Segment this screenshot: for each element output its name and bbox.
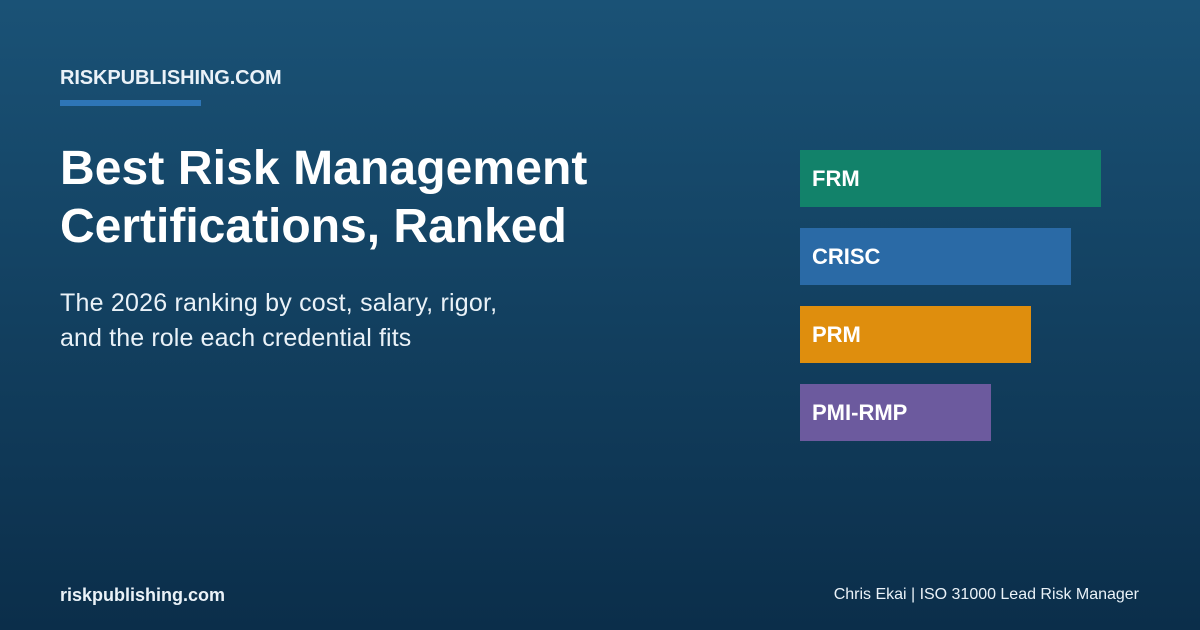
bar: CRISC: CRISC [812, 244, 880, 269]
subtitle [60, 289, 497, 352]
footer author credit: Chris Ekai | ISO 31000 Lead Risk Manager [834, 586, 1139, 603]
bar: FRM [800, 150, 1101, 207]
title [60, 142, 588, 253]
bar: PMI-RMP [800, 384, 991, 441]
bar: FRM: FRM [812, 166, 860, 191]
subtitle: The 2026 ranking by cost, salary, rigor, [60, 289, 497, 317]
title: Certifications, Ranked [60, 200, 567, 253]
brand accent rule [60, 100, 201, 106]
subtitle: and the role each credential fits [60, 324, 411, 352]
bar: PMI-RMP: PMI-RMP [812, 400, 907, 425]
title: Best Risk Management [60, 142, 588, 195]
bar: PRM: PRM [812, 322, 861, 347]
ranked bar chart [800, 150, 1101, 441]
bar: CRISC [800, 228, 1071, 285]
bar: PRM [800, 306, 1031, 363]
brand name: RISKPUBLISHING.COM [60, 67, 282, 89]
footer site link: riskpublishing.com [60, 585, 225, 605]
